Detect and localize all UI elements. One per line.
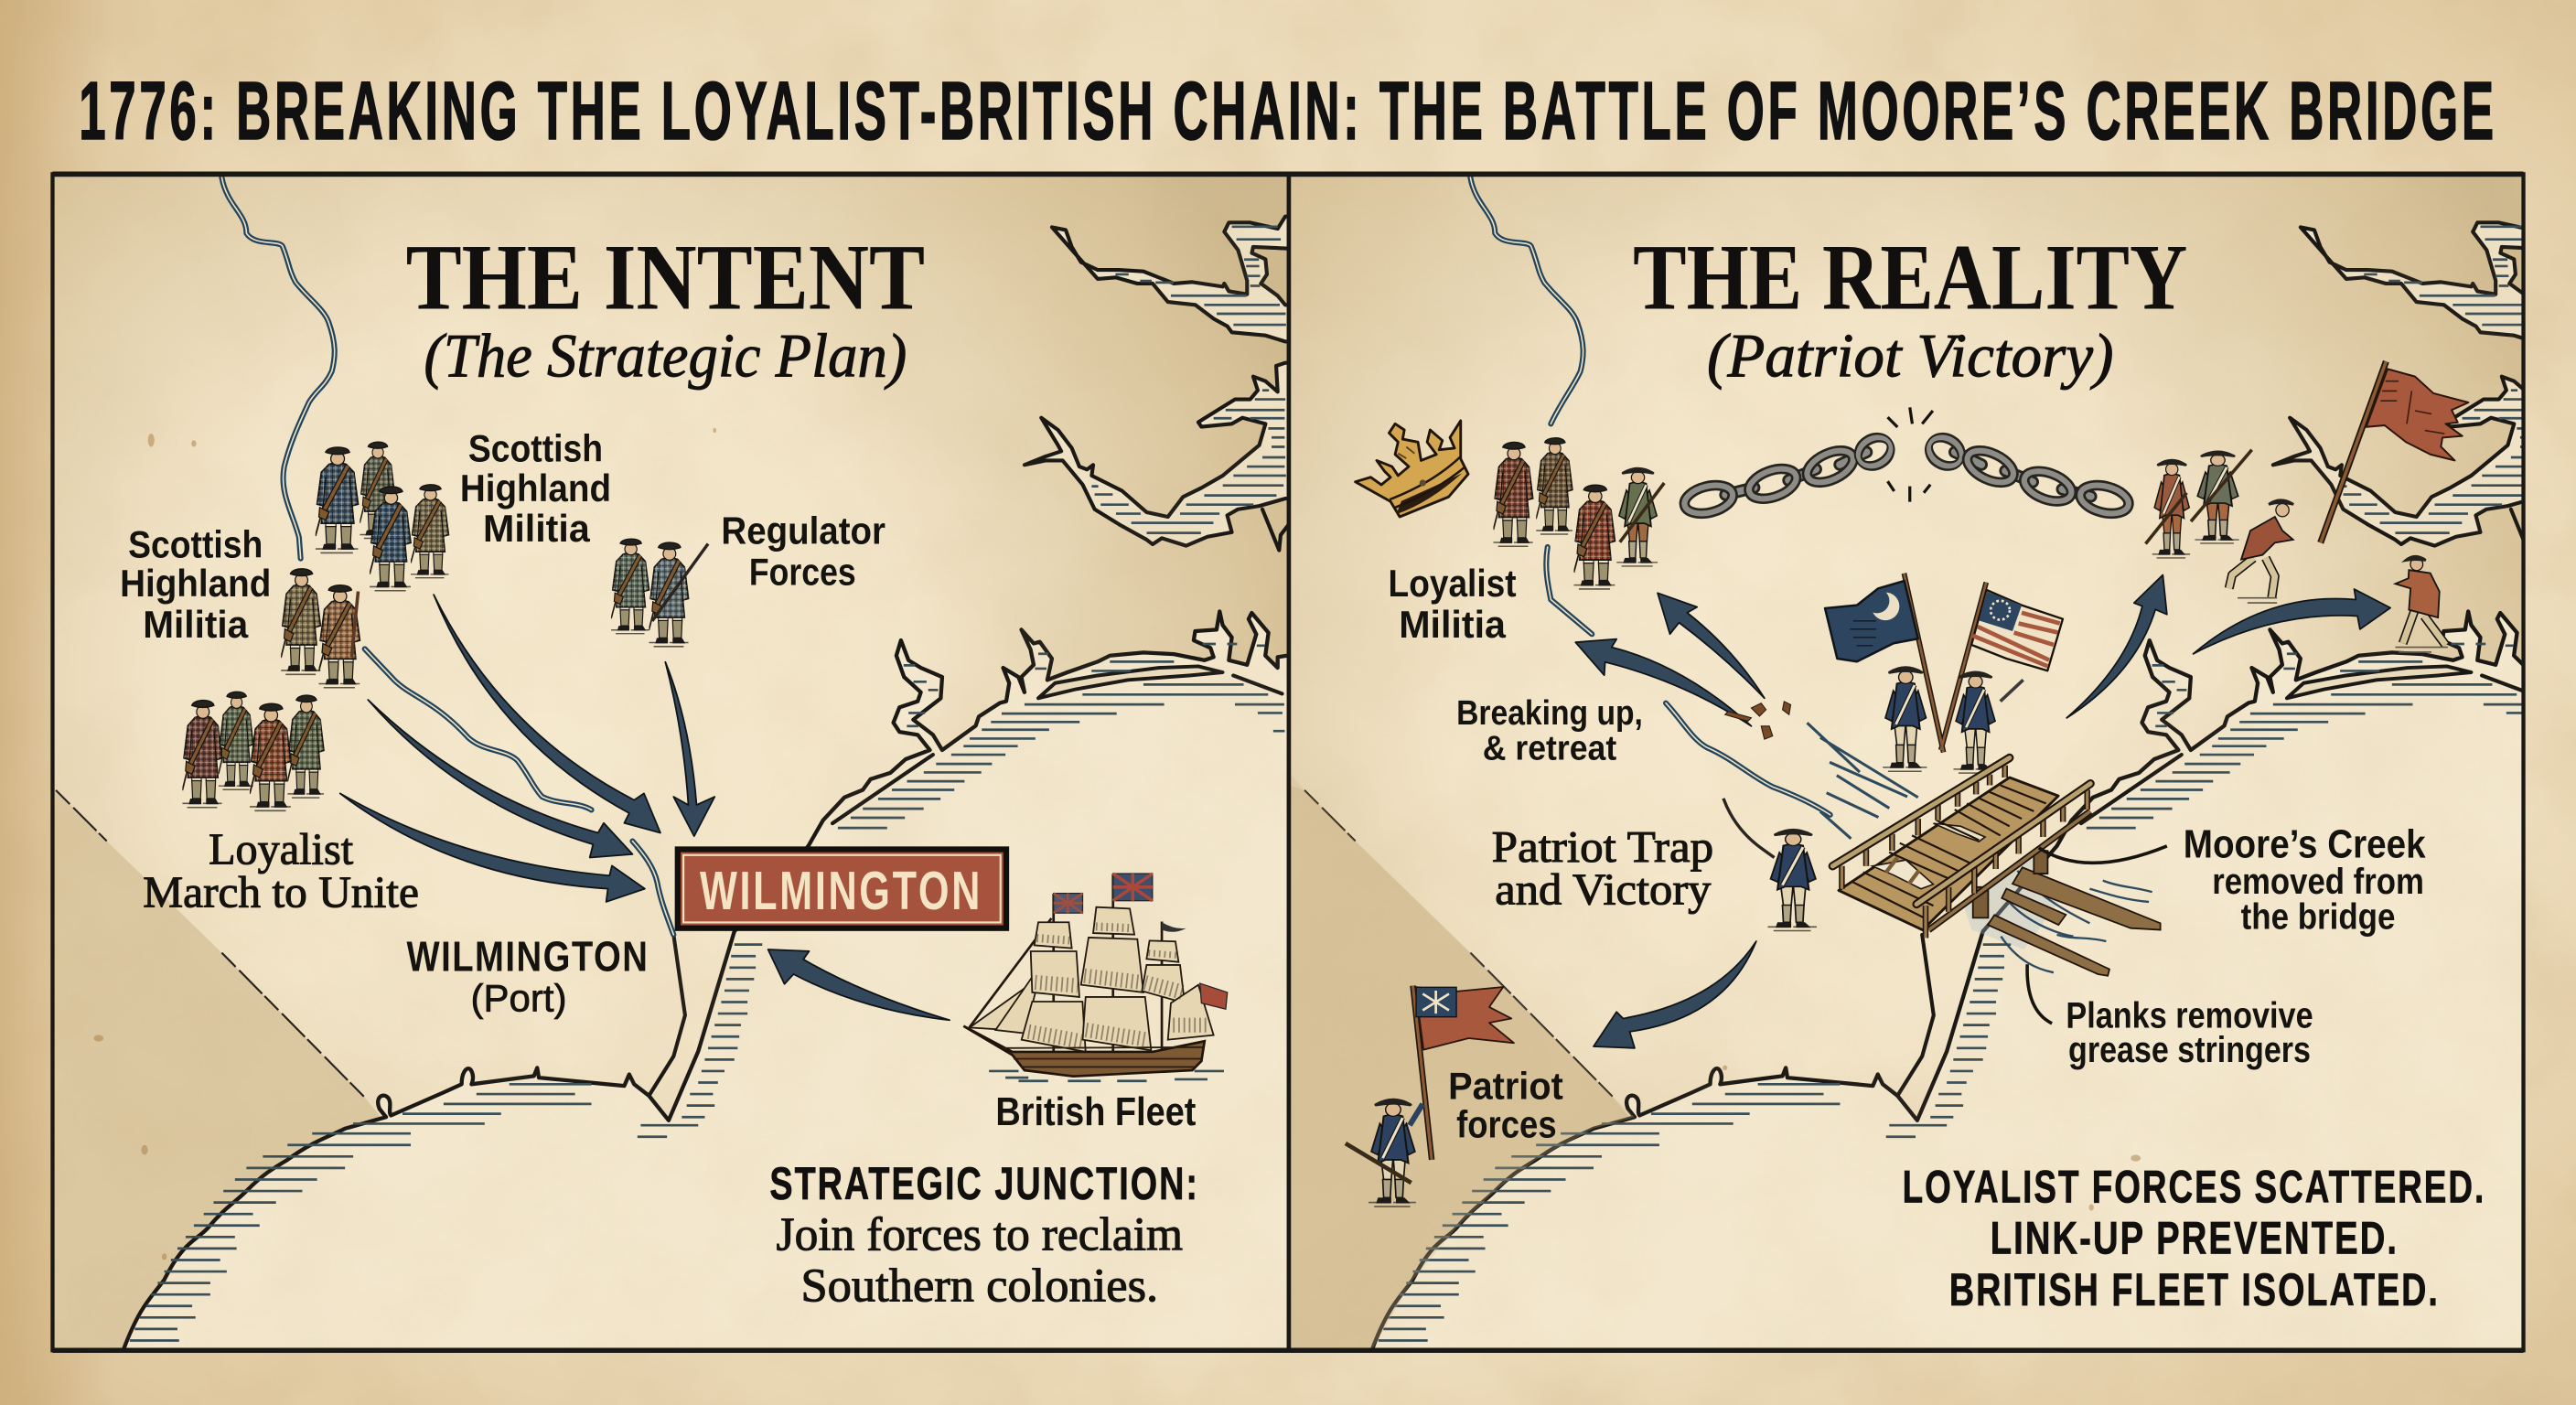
panel: the intent [0, 174, 1315, 1372]
arrow: fleet to wilmington [768, 949, 950, 1020]
callout: strategic junction: Southern colonies. [801, 1260, 1158, 1312]
runner [2229, 558, 2275, 597]
subheading: (The Strategic Plan) [424, 320, 907, 390]
label: breaking up and retreat: & retreat [1483, 729, 1617, 767]
land shading [1288, 772, 1635, 1350]
icon: british ship [963, 874, 1228, 1081]
icon: damaged bridge [1832, 757, 2161, 976]
label: breaking up and retreat: Breaking up, [1456, 693, 1643, 732]
label: scottish highland militia upper: Militia [483, 508, 591, 550]
label: planks: Planks removive [2066, 995, 2313, 1035]
label: planks [2066, 995, 2313, 1070]
callout: strategic junction [769, 1157, 1199, 1312]
label: scottish highland militia lower: Highland [120, 563, 271, 605]
label: wilmington port [406, 932, 649, 1019]
soldiers: scottish highland militia (lower) [281, 569, 360, 688]
icon: red flag torn [2321, 361, 2468, 542]
soldiers: retreating loyalists [2145, 450, 2448, 652]
arrows: converging forces [340, 595, 714, 902]
creek water [1963, 857, 2064, 949]
debris [1725, 702, 1791, 739]
label: patriot forces: forces [1456, 1104, 1557, 1146]
callout: strategic junction: STRATEGIC JUNCTION: [769, 1157, 1199, 1209]
subheading: (Patriot Victory) [1707, 320, 2113, 390]
label: patriot trap and victory: and Victory [1495, 866, 1712, 915]
callout: outcome: LINK-UP PREVENTED. [1991, 1211, 2399, 1263]
callout: strategic junction: Join forces to reclaim [777, 1209, 1183, 1261]
river [221, 177, 673, 935]
label: loyalist militia: Loyalist [1389, 563, 1517, 605]
callout line: moore's creek [2039, 846, 2167, 863]
label: wilmington port: (Port) [471, 977, 567, 1019]
soldiers: scottish highland militia (upper) [316, 442, 448, 591]
icon: broken chain [1681, 407, 2131, 518]
soldiers: loyalist march [182, 692, 324, 810]
label: scottish highland militia lower: Scottish [128, 524, 263, 566]
panel: the reality [1249, 174, 2563, 1372]
label: loyalist militia [1389, 563, 1517, 646]
icon: patriot flag [1412, 986, 1514, 1160]
label: regulator forces: Forces [749, 551, 856, 593]
label: regulator forces: Regulator [721, 509, 886, 552]
label: scottish highland militia upper: Highland [460, 467, 611, 509]
callout: outcome [1903, 1161, 2485, 1315]
icon: crown [1356, 421, 1468, 517]
soldiers: loyalist militia [1493, 438, 1664, 589]
arrows: retreat and scatter [1575, 575, 2390, 1048]
label: moore's creek [2184, 822, 2427, 938]
label: breaking up and retreat [1456, 693, 1643, 767]
flags: south carolina and american [1825, 574, 2063, 753]
label: wilmington port: WILMINGTON [406, 932, 649, 980]
map: coastline and estuaries [0, 215, 1315, 1372]
label: loyalist march to unite: Loyalist [209, 826, 354, 874]
label: moore's creek: Moore’s Creek [2184, 822, 2427, 866]
label: patriot trap and victory: Patriot Trap [1492, 823, 1713, 872]
walker [2403, 609, 2445, 645]
label: loyalist militia: Militia [1399, 604, 1507, 646]
label: loyalist march to unite [143, 826, 419, 917]
label: british fleet: British Fleet [995, 1090, 1196, 1134]
label: patriot forces [1448, 1065, 1563, 1146]
label: planks: grease stringers [2068, 1030, 2311, 1070]
label: scottish highland militia upper: Scottish [468, 428, 603, 470]
deck [1839, 778, 2058, 930]
heading: the reality: THE REALITY [1633, 227, 2187, 330]
label: scottish highland militia upper [460, 428, 611, 550]
soldier: patriot with flag [1346, 1099, 1422, 1207]
label: loyalist march to unite: March to Unite [143, 868, 419, 917]
sign: wilmington: WILMINGTON [700, 860, 982, 921]
soldier: patriot with sword [1723, 799, 1817, 931]
soldiers: regulator forces [611, 539, 708, 647]
piles [1973, 851, 2047, 917]
aged spots [93, 223, 1283, 1260]
loose planks [2012, 867, 2161, 929]
near-side beam and posts [1928, 811, 2090, 930]
label: patriot forces: Patriot [1448, 1065, 1563, 1107]
heading: the intent: THE INTENT [406, 227, 925, 330]
label: scottish highland militia lower: Militia [143, 604, 249, 646]
label: scottish highland militia lower [120, 524, 271, 646]
callout line: planks [2027, 964, 2052, 1024]
label: regulator forces [721, 509, 886, 593]
label: patriot trap and victory [1492, 823, 1713, 915]
label: moore's creek: removed from [2212, 862, 2424, 902]
label: moore's creek: the bridge [2241, 897, 2395, 938]
soldiers: patriots at the bridge [1883, 668, 2023, 773]
sign: wilmington [678, 849, 1006, 928]
aged spots [1288, 174, 2524, 1350]
river [1470, 177, 1918, 839]
map: coastline and estuaries [1249, 215, 2563, 1372]
